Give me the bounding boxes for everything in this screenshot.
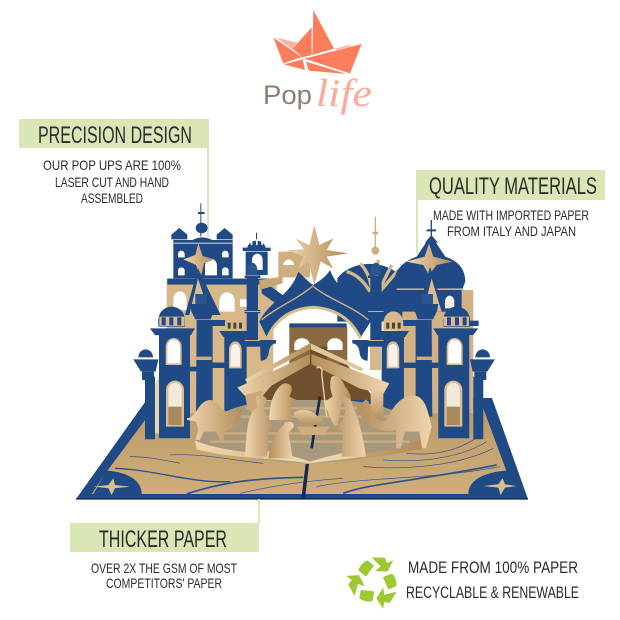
kneeling figure — [268, 422, 294, 458]
callout: precision design: ASSEMBLED — [81, 190, 143, 206]
front towers right — [352, 263, 495, 439]
corner ornaments — [93, 471, 142, 494]
callout: thicker paper: THICKER PAPER — [99, 526, 227, 553]
callout: precision design — [19, 119, 209, 237]
left camel — [187, 400, 243, 442]
callout: thicker paper: OVER 2X THE GSM OF MOST — [91, 560, 237, 576]
small gable — [185, 268, 221, 315]
callout: thicker paper — [70, 499, 260, 591]
wise man left — [245, 396, 276, 457]
pop-up card illustration — [76, 203, 528, 500]
right camel — [357, 395, 432, 448]
recycling statement — [406, 558, 579, 602]
shepherd staff — [317, 367, 327, 417]
callout: thicker paper: COMPETITORS' PAPER — [106, 575, 222, 591]
logo: Poplife — [263, 10, 372, 115]
stable back wall — [263, 363, 372, 400]
scene ring band — [195, 437, 425, 463]
centre courtyard — [273, 323, 363, 403]
floor swirl lines — [115, 433, 500, 494]
back walls — [153, 252, 479, 433]
callout: precision design: PRECISION DESIGN — [38, 122, 192, 149]
right domes — [337, 217, 465, 322]
wise man right — [331, 397, 366, 457]
spine — [301, 464, 309, 499]
recycling statement: MADE FROM 100% PAPER — [408, 558, 578, 577]
nativity scene — [187, 343, 432, 463]
icon: origami paper boat — [273, 10, 362, 74]
logo: Poplife: life — [316, 72, 372, 115]
wordmark: Pop — [263, 80, 312, 110]
card base — [76, 398, 528, 500]
icon: bethlehem star — [285, 225, 348, 285]
manger with child — [293, 410, 323, 425]
left palace — [171, 203, 271, 315]
callout: quality materials — [416, 170, 605, 254]
callout: quality materials: FROM ITALY AND JAPAN — [447, 223, 576, 239]
icon: gold star left — [183, 243, 214, 278]
joseph — [324, 376, 351, 430]
scene floor — [197, 398, 425, 463]
icon: recycling arrows — [344, 557, 403, 610]
corner stars — [93, 478, 130, 495]
centre arch roof and star — [259, 225, 371, 338]
callout: precision design: LASER CUT AND HAND — [55, 174, 169, 190]
upper small tower — [246, 252, 268, 275]
mary — [269, 383, 297, 420]
icon: gold star right — [406, 243, 453, 275]
callout: precision design: OUR POP UPS ARE 100% — [43, 157, 181, 173]
front towers left — [133, 263, 276, 439]
stable roof — [245, 343, 310, 383]
